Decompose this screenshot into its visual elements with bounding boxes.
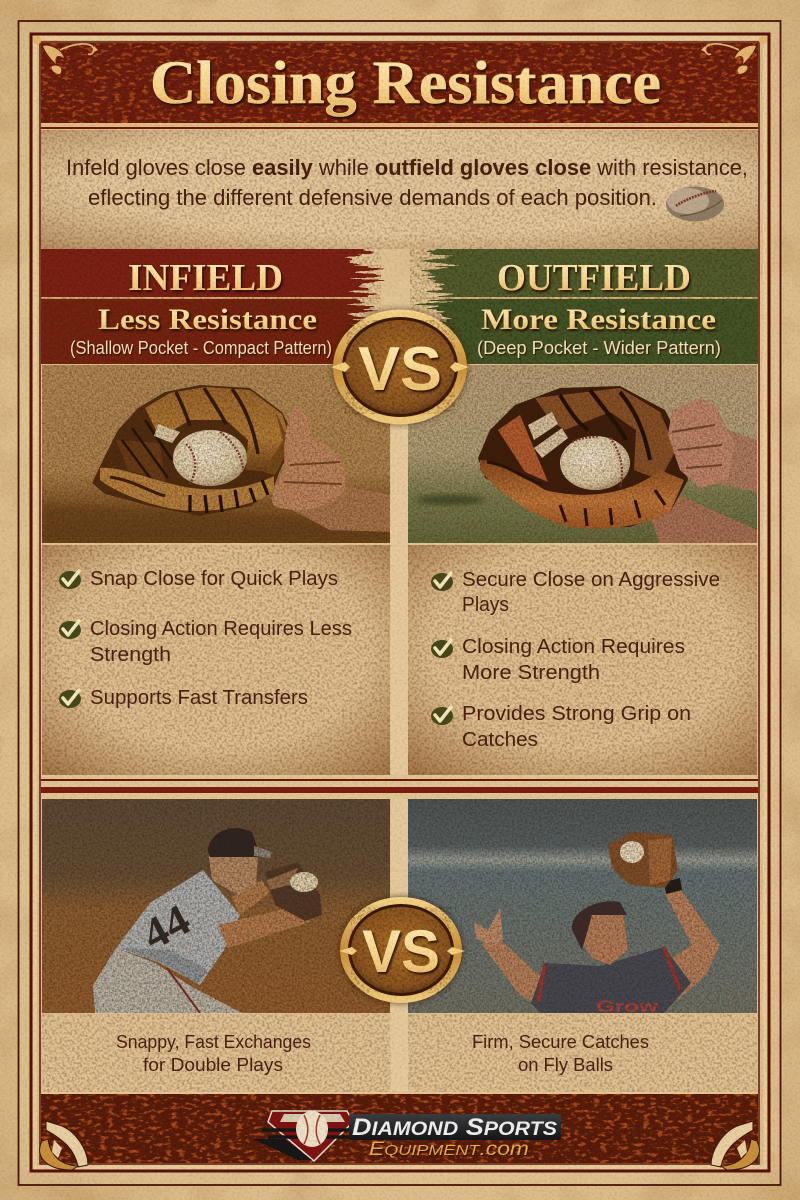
logo baseball bbox=[296, 1111, 328, 1147]
corner ornament: bottom left bbox=[40, 1121, 88, 1170]
corner ornament: top right bbox=[701, 36, 768, 74]
panel: infield points bbox=[42, 545, 390, 775]
intro text: Infeld gloves close easily while outfield gloves close with resistance, bbox=[66, 155, 748, 180]
corner ornament: top left bbox=[32, 36, 98, 74]
subheading: less resistance: Less Resistance bbox=[98, 303, 317, 336]
note: deep pocket: (Deep Pocket - Wider Pattern) bbox=[477, 338, 721, 358]
bullet: fast transfers: Supports Fast Transfers bbox=[90, 687, 308, 709]
bullet: secure close: Secure Close on Aggressive bbox=[462, 569, 720, 591]
logo plate bbox=[349, 1114, 561, 1140]
subheading: more resistance: More Resistance bbox=[481, 303, 716, 336]
bullet: secure close: Plays bbox=[462, 594, 509, 616]
badge: vs top bbox=[331, 308, 469, 426]
glove bbox=[478, 386, 688, 529]
hand bbox=[272, 405, 346, 510]
bullet: secure close bbox=[431, 569, 720, 616]
logo diamond bbox=[253, 1111, 353, 1161]
bullet: strong grip: Catches bbox=[462, 729, 538, 751]
forearm bbox=[650, 496, 757, 545]
photo: infielder bbox=[42, 799, 390, 1013]
ground shadow bbox=[42, 505, 390, 543]
glove bbox=[92, 385, 296, 516]
photo: outfield glove bbox=[408, 365, 757, 545]
caption: infield: for Double Plays bbox=[143, 1054, 283, 1075]
panel: outfield header bbox=[410, 249, 796, 364]
bullet: strong grip: Provides Strong Grip on bbox=[462, 703, 691, 725]
bullet: more strength bbox=[431, 636, 685, 684]
heading: outfield: OUTFIELD bbox=[497, 257, 691, 299]
outfielder figure bbox=[474, 878, 720, 1016]
hand bbox=[668, 398, 735, 488]
bullet: closing action: Strength bbox=[90, 644, 171, 666]
shadow on grass bbox=[416, 495, 484, 505]
ball bbox=[560, 436, 630, 490]
bullet: more strength: More Strength bbox=[462, 662, 600, 684]
infielder glove bbox=[265, 862, 322, 921]
panel: infield header bbox=[0, 249, 381, 364]
footer band bbox=[41, 1092, 758, 1163]
icon: baseball bbox=[666, 186, 724, 222]
badge: vs bottom bbox=[339, 896, 465, 1004]
panel: outfield points bbox=[408, 545, 757, 775]
photo: infield glove bbox=[42, 365, 392, 543]
corner ornament: bottom right bbox=[711, 1121, 759, 1170]
intro text: eflecting the different defensive demands of each position. bbox=[88, 185, 657, 210]
caption: infield bbox=[42, 1014, 390, 1092]
photo: outfielder bbox=[408, 799, 757, 1016]
section divider bbox=[41, 775, 758, 799]
note: shallow pocket: (Shallow Pocket - Compact Pattern) bbox=[70, 338, 332, 358]
logo wordmark: DIAMOND SPORTS bbox=[352, 1114, 557, 1141]
center divider stripes bbox=[391, 365, 408, 1091]
caption: outfield bbox=[408, 1014, 757, 1092]
infielder figure bbox=[93, 828, 310, 1013]
caption: outfield: on Fly Balls bbox=[518, 1054, 613, 1075]
bullet: strong grip bbox=[431, 703, 691, 751]
bullet: closing action bbox=[59, 618, 352, 666]
bullet: closing action: Closing Action Requires Less bbox=[90, 618, 352, 640]
caption: outfield: Firm, Secure Catches bbox=[472, 1031, 649, 1052]
intro text bbox=[66, 155, 748, 210]
ball bbox=[173, 430, 247, 486]
caption: infield: Snappy, Fast Exchanges bbox=[116, 1031, 311, 1052]
outfielder glove bbox=[608, 832, 678, 888]
bullet: snap close: Snap Close for Quick Plays bbox=[90, 568, 338, 590]
title: Closing Resistance bbox=[150, 50, 661, 117]
logo bbox=[253, 1111, 561, 1161]
badge: vs top: VS bbox=[358, 335, 442, 404]
badge: vs bottom: VS bbox=[362, 918, 440, 985]
infielder figure: 44 bbox=[134, 895, 198, 960]
bullet: more strength: Closing Action Requires bbox=[462, 636, 685, 658]
title banner bbox=[41, 43, 758, 129]
forearm bbox=[270, 486, 390, 532]
logo url: EQUIPMENT .com bbox=[369, 1139, 529, 1160]
outfielder figure: Grow bbox=[596, 997, 659, 1016]
heading: infield: INFIELD bbox=[128, 257, 283, 299]
